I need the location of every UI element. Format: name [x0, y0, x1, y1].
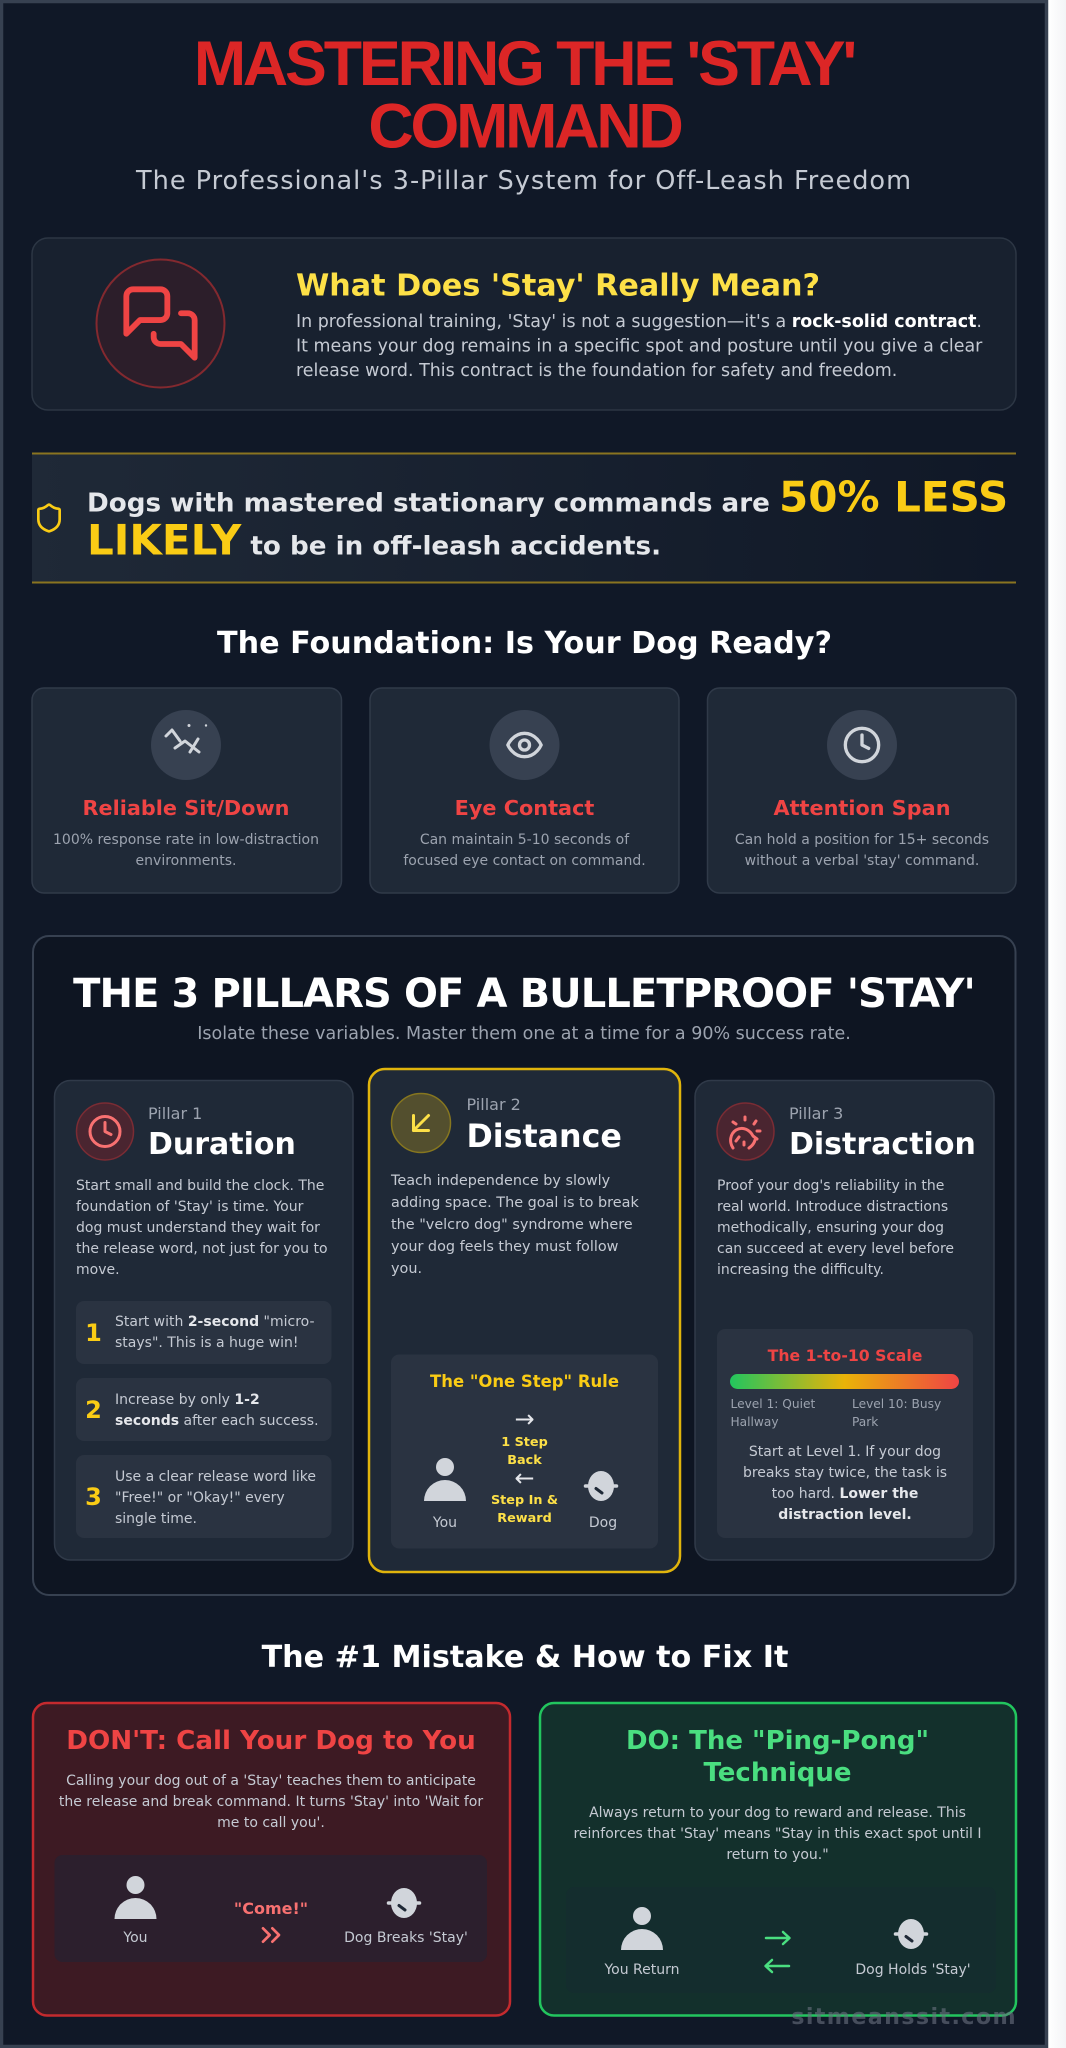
- legend: Level 10: Busy: [852, 1397, 941, 1411]
- panel: do: [540, 1703, 1016, 2016]
- text block: without a verbal 'stay' command.: [745, 853, 979, 869]
- text block: breaks stay twice, the task is: [743, 1465, 947, 1481]
- icon: dog: [586, 1471, 616, 1501]
- text block: move.: [76, 1262, 120, 1278]
- heading: DO: The "Ping-Pong": [626, 1726, 929, 1756]
- text block: distraction level.: [778, 1507, 912, 1523]
- icon: eye: [490, 710, 560, 780]
- text block: the release word, not just for you to: [76, 1241, 328, 1257]
- arrow: chevrons: [262, 1926, 280, 1944]
- text block: real world. Introduce distractions: [717, 1199, 948, 1215]
- step 3: Use a clear release word like: [115, 1469, 316, 1485]
- icon: distraction: [717, 1103, 774, 1160]
- text block: [390, 1173, 639, 1277]
- text block: increasing the difficulty.: [717, 1262, 884, 1278]
- text block: the "velcro dog" syndrome where: [391, 1217, 633, 1233]
- panel: pillar 3 distraction: [695, 1080, 994, 1560]
- heading: Attention Span: [774, 796, 950, 820]
- panel: eye contact: [370, 688, 679, 893]
- icon: clock: [76, 1103, 134, 1160]
- arrow: step in: ←: [514, 1464, 535, 1492]
- text block: methodically, ensuring your dog: [717, 1220, 944, 1236]
- panel: don't: [33, 1703, 510, 2016]
- step 1: Start with 2-second "micro-: [115, 1314, 315, 1330]
- arrow: right: [766, 1932, 790, 1944]
- step 1: 1: [85, 1319, 102, 1347]
- step 3: "Free!" or "Okay!" every: [115, 1490, 285, 1506]
- text block: foundation of 'Stay' is time. Your: [76, 1199, 304, 1215]
- text block: [717, 1178, 954, 1278]
- icon: shield: [37, 503, 61, 533]
- text block: Teach independence by slowly: [390, 1173, 611, 1189]
- step 1: [76, 1301, 332, 1364]
- label: [491, 1493, 558, 1526]
- label: Dog: [589, 1515, 617, 1531]
- panel: one step rule: [391, 1354, 658, 1548]
- label: Reward: [497, 1511, 552, 1526]
- panel: scale: [717, 1329, 973, 1538]
- label: You Return: [603, 1962, 680, 1978]
- text block: the release and break command. It turns 'Stay' into 'Wait for: [59, 1794, 483, 1810]
- chart: gradient scale bar: [730, 1374, 959, 1389]
- text block: focused eye contact on command.: [403, 853, 646, 869]
- text block: [743, 1444, 947, 1523]
- text block: Can hold a position for 15+ seconds: [735, 832, 989, 848]
- label: You: [122, 1930, 148, 1946]
- label: Dog Breaks 'Stay': [344, 1930, 468, 1946]
- panel: attention span: [708, 688, 1016, 893]
- text block: Proof your dog's reliability in the: [717, 1178, 944, 1194]
- text block: [59, 1773, 483, 1831]
- heading: Distance: [466, 1119, 622, 1155]
- label: Dog Holds 'Stay': [855, 1962, 971, 1978]
- text block: [76, 1178, 328, 1278]
- step 1: stays". This is a huge win!: [115, 1335, 299, 1351]
- text block: your dog feels they must follow: [391, 1239, 619, 1255]
- diagram: calling the dog: [54, 1855, 487, 1962]
- step 2: Increase by only 1-2: [115, 1392, 260, 1408]
- step 3: single time.: [115, 1511, 197, 1527]
- text block: adding space. The goal is to break: [391, 1195, 639, 1211]
- label: Pillar 1: [148, 1104, 202, 1123]
- icon: dog: [388, 1888, 420, 1918]
- text block: definition: release word. This contract is the foundation for safety and freedom.: [296, 361, 897, 381]
- icon: person: [621, 1907, 663, 1950]
- text block: stat: Dogs with mastered stationary commands are 50% LESS: [87, 472, 1008, 522]
- text block: stat: [87, 472, 1008, 564]
- legend: Level 1: Quiet: [730, 1397, 815, 1411]
- label: 1 Step: [501, 1435, 548, 1450]
- icon: clock: [827, 710, 897, 780]
- watermark: sitmeanssit.com: [791, 2004, 1017, 2030]
- icon: chat bubbles: [96, 260, 224, 388]
- text block: Start small and build the clock. The: [76, 1178, 324, 1194]
- text block: me to call you'.: [217, 1815, 325, 1831]
- subheading: Isolate these variables. Master them one at a time for a 90% success rate.: [197, 1024, 851, 1044]
- text block: [403, 832, 646, 869]
- icon: sit: [151, 710, 221, 780]
- text block: dog must understand they wait for: [76, 1220, 320, 1236]
- heading: Duration: [148, 1127, 296, 1162]
- text block: definition: It means your dog remains in a specific spot and posture until you give a clear: [296, 336, 983, 356]
- step 2: seconds after each success.: [115, 1413, 319, 1429]
- heading: foundation: The Foundation: Is Your Dog Ready?: [217, 626, 832, 661]
- text block: 100% response rate in low-distraction: [53, 832, 319, 848]
- label: [501, 1435, 548, 1468]
- icon: dog: [896, 1919, 926, 1949]
- title: MASTERING THE 'STAY': [194, 29, 854, 99]
- panel: reliable sit/down: [32, 688, 342, 893]
- text block: [53, 832, 319, 869]
- heading: Reliable Sit/Down: [83, 796, 289, 820]
- heading: [626, 1726, 929, 1788]
- panel: three pillars: [33, 936, 1016, 1595]
- label: come: "Come!": [234, 1899, 308, 1918]
- text block: Calling your dog out of a 'Stay' teaches them to anticipate: [66, 1773, 476, 1789]
- label: You: [432, 1515, 457, 1531]
- panel: pillar 2 distance: [369, 1069, 680, 1572]
- label: Pillar 2: [466, 1095, 521, 1114]
- text block: environments.: [136, 853, 236, 869]
- text block: definition: In professional training, 'Stay' is not a suggestion—it's a rock-solid contract.: [296, 312, 982, 332]
- text block: return to you.": [726, 1847, 829, 1863]
- legend: Hallway: [730, 1415, 779, 1429]
- label: Back: [507, 1453, 542, 1468]
- heading: Distraction: [789, 1127, 976, 1162]
- text block: [735, 832, 989, 869]
- diagram: returning to the dog: [566, 1887, 996, 1993]
- icon: person: [424, 1458, 466, 1501]
- heading: DON'T: Call Your Dog to You: [66, 1726, 476, 1756]
- step 3: 3: [85, 1483, 102, 1511]
- text block: reinforces that 'Stay' means "Stay in this exact spot until I: [573, 1826, 982, 1842]
- text block: can succeed at every level before: [717, 1241, 954, 1257]
- step 2: [76, 1378, 332, 1441]
- title: COMMAND: [368, 92, 682, 162]
- heading: The "One Step" Rule: [430, 1372, 619, 1391]
- step 2: 2: [85, 1396, 102, 1424]
- arrow: left: [766, 1960, 789, 1972]
- icon: person: [114, 1876, 156, 1919]
- label: Step In &: [491, 1493, 558, 1508]
- text block: [573, 1805, 982, 1863]
- heading: mistake: The #1 Mistake & How to Fix It: [262, 1640, 788, 1675]
- text block: Always return to your dog to reward and release. This: [589, 1805, 966, 1821]
- legend: Park: [852, 1415, 879, 1429]
- text block: you.: [391, 1261, 422, 1277]
- text block: stat: LIKELY to be in off-leash accidents.: [87, 516, 661, 564]
- heading: Eye Contact: [455, 796, 594, 820]
- icon: arrow down left: [392, 1094, 450, 1152]
- legend: [730, 1397, 941, 1429]
- heading: three pillars: THE 3 PILLARS OF A BULLETPROOF 'STAY': [73, 971, 975, 1017]
- heading: Technique: [703, 1758, 852, 1788]
- panel: what does stay mean: [32, 238, 1016, 410]
- text block: definition: [296, 312, 983, 381]
- subtitle: The Professional's 3-Pillar System for Off-Leash Freedom: [135, 166, 912, 196]
- text block: Start at Level 1. If your dog: [749, 1444, 941, 1460]
- title: [194, 29, 854, 162]
- callout: 50 percent stat: [32, 453, 1016, 583]
- arrow: step back: →: [514, 1405, 535, 1433]
- text block: Can maintain 5-10 seconds of: [420, 832, 630, 848]
- heading: The 1-to-10 Scale: [768, 1346, 922, 1365]
- label: Pillar 3: [789, 1104, 843, 1123]
- panel: pillar 1 duration: [54, 1080, 353, 1560]
- text block: too hard. Lower the: [772, 1486, 918, 1502]
- heading: what does stay mean: What Does 'Stay' Really Mean?: [296, 268, 820, 304]
- step 3: [76, 1455, 332, 1538]
